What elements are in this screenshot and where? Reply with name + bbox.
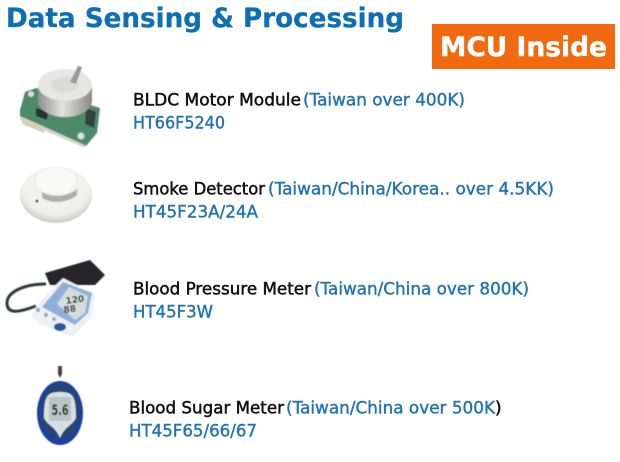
- row 2 text: Smoke Detector: [133, 180, 554, 222]
- badge: MCU Inside: [432, 24, 615, 69]
- icon: BLDC motor module: [20, 66, 100, 148]
- icon: blood pressure meter: 120: [65, 294, 85, 307]
- row 2 text: Smoke Detector: HT45F23A/24A: [133, 202, 258, 222]
- row 4 text: Blood Sugar Meter: ): [495, 398, 502, 418]
- row 1 text: BLDC Motor Module: HT66F5240: [133, 114, 225, 134]
- icon: blood sugar meter: [37, 366, 83, 445]
- row 1 text: BLDC Motor Module: [133, 90, 465, 134]
- row 4 text: Blood Sugar Meter: HT45F65/66/67: [129, 422, 257, 442]
- row 1 text: BLDC Motor Module: (Taiwan over 400K): [303, 90, 465, 110]
- row 2 text: Smoke Detector: Smoke Detector: [133, 180, 265, 200]
- icon: smoke detector: [20, 167, 92, 223]
- row 3 text: Blood Pressure Meter: HT45F3W: [133, 302, 213, 322]
- icon: blood sugar meter: 5.6: [52, 403, 68, 419]
- row 4 text: Blood Sugar Meter: [129, 398, 502, 442]
- row 3 text: Blood Pressure Meter: Blood Pressure Meter: [133, 280, 311, 300]
- row 3 text: Blood Pressure Meter: (Taiwan/China over 800K): [314, 280, 529, 300]
- row 2 text: Smoke Detector: (Taiwan/China/Korea.. over 4.5KK): [268, 180, 554, 200]
- row 1 text: BLDC Motor Module: BLDC Motor Module: [133, 90, 301, 110]
- icon: blood pressure meter: [7, 260, 105, 337]
- title: Data Sensing & Processing: [6, 3, 404, 34]
- row 4 text: Blood Sugar Meter: Blood Sugar Meter: [129, 398, 284, 418]
- row 3 text: Blood Pressure Meter: [133, 280, 529, 322]
- icon: blood pressure meter: 88: [63, 304, 77, 316]
- row 4 text: Blood Sugar Meter: (Taiwan/China over 500K: [286, 398, 496, 418]
- badge: MCU Inside: MCU Inside: [440, 32, 607, 63]
